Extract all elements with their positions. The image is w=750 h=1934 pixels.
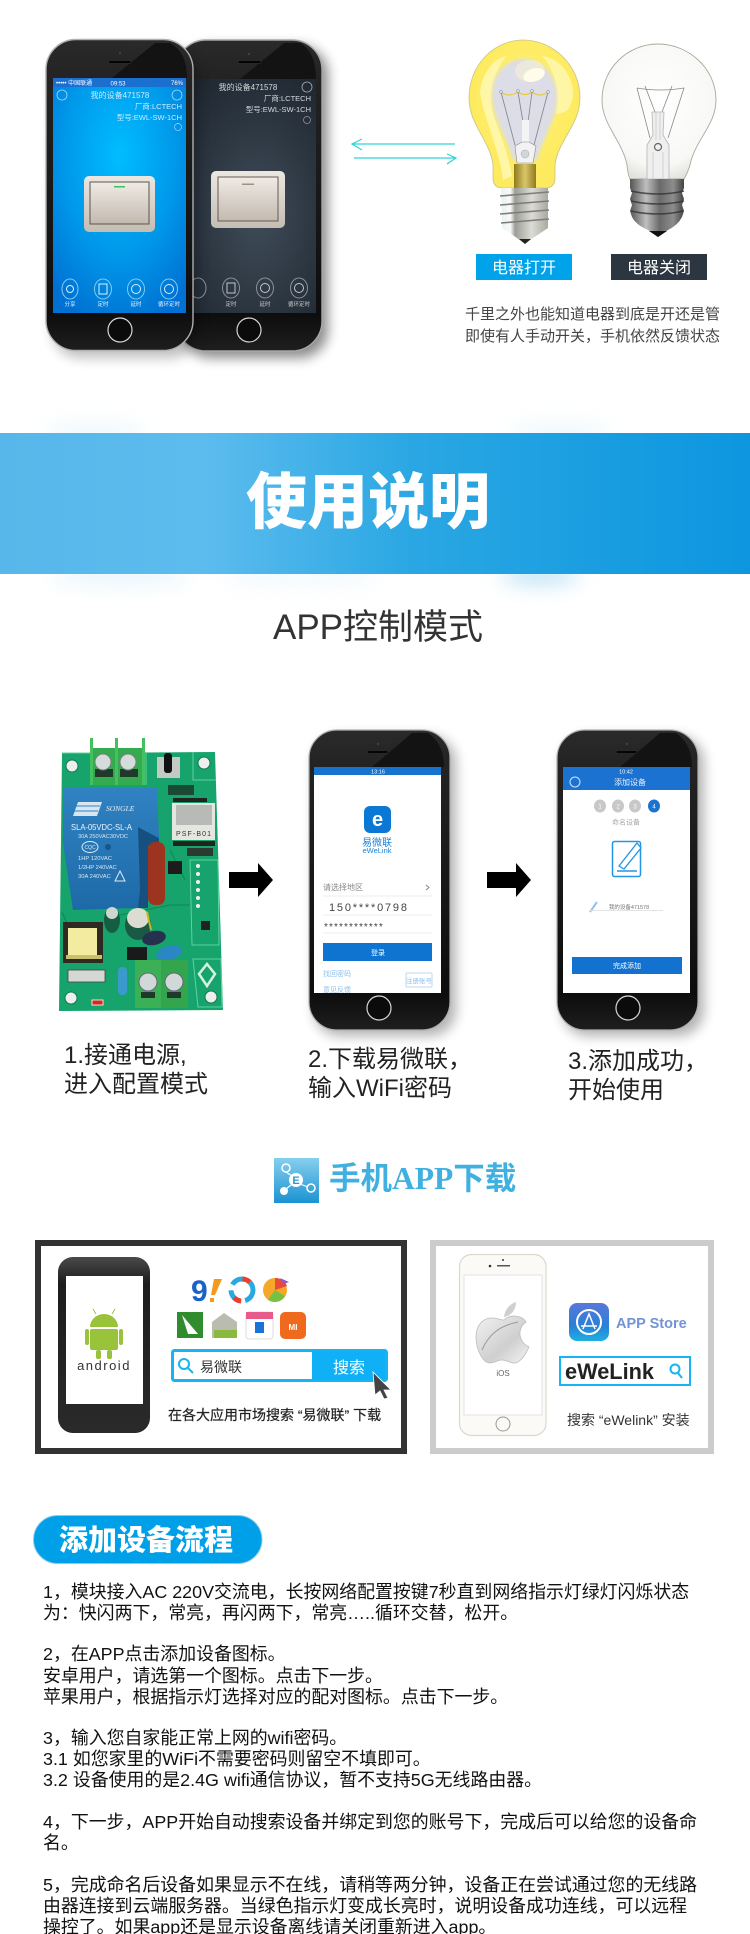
search box: 易微联: 易微联 [200,1359,242,1375]
top terminal block [90,738,145,785]
text: feedback description: 千里之外也能知道电器到底是开还是管 [465,306,720,323]
step 5: 5，完成命名后设备如果显示不在线，请稍等两分钟，设备正在尝试通过您的无线路 [43,1875,697,1895]
phone: add device screen: 完成添加 [613,961,641,970]
phone: login screen: ************ [324,922,384,933]
label: appliance off: 电器关闭 [627,259,691,277]
phone: blue screen, appliance on: 09:53 [110,82,126,88]
step 1: 为：快闪两下，常亮，再闪两下，常亮…..循环交替，松开。 [43,1603,518,1623]
phone: login screen [309,730,456,1036]
search box: eWeLink: eWeLink [565,1359,655,1384]
phone: blue screen, appliance on: 延时 [130,300,142,308]
icon: App Store [569,1303,687,1341]
phone: blue screen, appliance on: 型号:EWL-SW-1CH [117,113,182,122]
icon: app markets: 9 [191,1275,208,1308]
phone: add device screen: 1 [598,804,602,810]
phone: login screen: eWeLink [362,846,392,855]
panel: iOS download [433,1243,711,1451]
step 2 [43,1644,508,1707]
arrow: two-way link between phone and bulbs [352,139,456,164]
step 3 [43,1728,542,1790]
phone: add device screen: 添加设备 [614,777,646,787]
caption: step 2: 2.下载易微联， [308,1046,472,1073]
phone: add device screen [557,730,704,1036]
step 2: 安卓用户，请选第一个图标。点击下一步。 [43,1666,383,1686]
caption: step 1: 1.接通电源, [64,1042,187,1069]
text block: step instructions [43,1582,697,1934]
relay: SONGLE [106,804,135,813]
phone: dark screen, appliance off: 我的设备471578 [219,82,278,92]
caption: iOS instruction: 搜索 “eWelink” 安装 [567,1412,690,1428]
search box: eWeLink [560,1357,690,1385]
phone: add device screen: 10:42 [619,770,633,776]
icon: iPhone [460,1254,546,1436]
relay: 1/2HP 240VAC [78,865,117,871]
icon: Android phone: android [77,1358,131,1373]
picture: relay circuit board: PSF-B01 [176,831,211,838]
heading pill: add device process [34,1516,262,1564]
icon: app markets [177,1275,306,1339]
panel: phones showing appliance state [46,40,328,358]
phone: login screen: e [372,809,383,831]
phone: add device screen: 2 [616,804,620,810]
step 4: 名。 [43,1833,79,1853]
step 4 [43,1812,697,1853]
bottom terminal block [135,960,188,1008]
phone: blue screen, appliance on: 定时 [97,300,109,308]
step 5: 由器连接到云端服务器。当绿色指示灯变成长亮时，说明设备成功连线，可以远程 [43,1896,687,1916]
phone: dark screen, appliance off: 延时 [259,300,271,308]
phone: login screen: 注册账号 [406,976,432,985]
relay: 30A 240VAC [78,874,111,880]
step 2: 苹果用户，根据指示灯选择对应的配对图标。点击下一步。 [43,1687,508,1707]
step 1: 1，模块接入AC 220V交流电，长按网络配置按键7秒直到网络指示灯绿灯闪烁状态 [43,1582,689,1602]
phone: blue screen, appliance on [46,40,198,358]
arrow: step 1 to step 2 [229,863,273,897]
step 3: 3.2 设备使用的是2.4G wifi通信协议，暂不支持5G无线路由器。 [43,1770,542,1790]
icon: app logo: E [292,1175,300,1187]
relay: SLA-05VDC-SL-A [71,822,132,832]
phone: login screen: 意见反馈 [323,985,351,994]
banner: usage instructions [0,427,750,583]
phone: login screen: 登录 [371,948,385,957]
phone: add device screen: 命名设备 [612,818,640,826]
text: feedback description [465,306,720,345]
relay: CQC [84,845,96,851]
icon: Android phone [58,1257,150,1433]
step 5 [43,1875,697,1934]
banner: usage instructions: 使用说明 [246,468,490,536]
arrow: step 2 to step 3 [487,863,531,897]
phone: login screen: 找回密码 [323,969,351,978]
step 3: 3.1 如您家里的WiFi不需要密码则留空不填即可。 [43,1749,431,1769]
caption: step 2 [308,1046,472,1102]
phone: login screen: 150****0798 [329,902,409,914]
caption: Android instruction: 在各大应用市场搜索 “易微联” 下载 [168,1407,381,1423]
phone: blue screen, appliance on: ••••• 中国联通 [56,79,92,87]
label: appliance off [611,254,707,280]
phone: blue screen, appliance on: 厂商:LCTECH [135,101,182,111]
heading: mobile app download: 手机APP下载 [329,1160,516,1196]
search box: 易微联 [172,1350,391,1399]
step 2: 2，在APP点击添加设备图标。 [43,1644,286,1664]
relay: 1HP 120VAC [78,856,112,862]
caption: step 3 [568,1048,708,1104]
step 3: 3，输入您自家能正常上网的wifi密码。 [43,1728,347,1748]
caption: step 2: 输入WiFi密码 [308,1075,452,1102]
caption: step 3: 3.添加成功， [568,1048,708,1075]
phone: add device screen: 4 [652,804,656,810]
phone: dark screen, appliance off: 循环定时 [288,300,310,308]
phone: login screen: 请选择地区 [323,882,363,892]
relay: 30A 250VAC30VDC [78,834,128,840]
icon: app logo [274,1158,319,1203]
icon: iPhone: iOS [496,1369,510,1378]
icon: App Store: APP Store [616,1316,687,1332]
panel: Android download [38,1243,404,1451]
phone: blue screen, appliance on: 分享 [64,300,76,308]
step 4: 4，下一步，APP开始自动搜索设备并绑定到您的账号下，完成后可以给您的设备命 [43,1812,697,1832]
phone: blue screen, appliance on: 76% [171,81,184,87]
phone: dark screen, appliance off: 厂商:LCTECH [264,93,311,103]
label: appliance on [476,254,572,280]
relay [63,787,159,910]
heading pill: add device process: 添加设备流程 [59,1524,233,1557]
phone: add device screen: 3 [633,804,637,810]
picture: relay circuit board [59,738,223,1011]
phone: dark screen, appliance off [170,40,328,358]
caption: step 1: 进入配置模式 [64,1071,208,1098]
caption: step 3: 开始使用 [568,1077,664,1104]
phone: blue screen, appliance on: 我的设备471578 [91,90,150,100]
search box: 易微联: 搜索 [333,1359,365,1377]
phone: dark screen, appliance off: 定时 [225,300,237,308]
caption: step 1 [64,1042,208,1098]
phone: blue screen, appliance on: 循环定时 [158,300,180,308]
icon: app markets: MI [289,1323,297,1332]
step 1 [43,1582,689,1623]
icon: lit bulb [469,40,580,244]
phone: add device screen: 我的设备471578 [609,903,649,911]
phone: dark screen, appliance off: 型号:EWL-SW-1CH [246,105,311,114]
icon: unlit bulb [602,44,716,237]
text: feedback description: 即使有人手动开关，手机依然反馈状态 [465,328,720,345]
phone: login screen: 易微联 [362,836,392,849]
phone: login screen: 13:16 [371,770,385,776]
label: appliance on: 电器打开 [492,259,556,277]
heading: APP control mode: APP控制模式 [273,608,483,647]
